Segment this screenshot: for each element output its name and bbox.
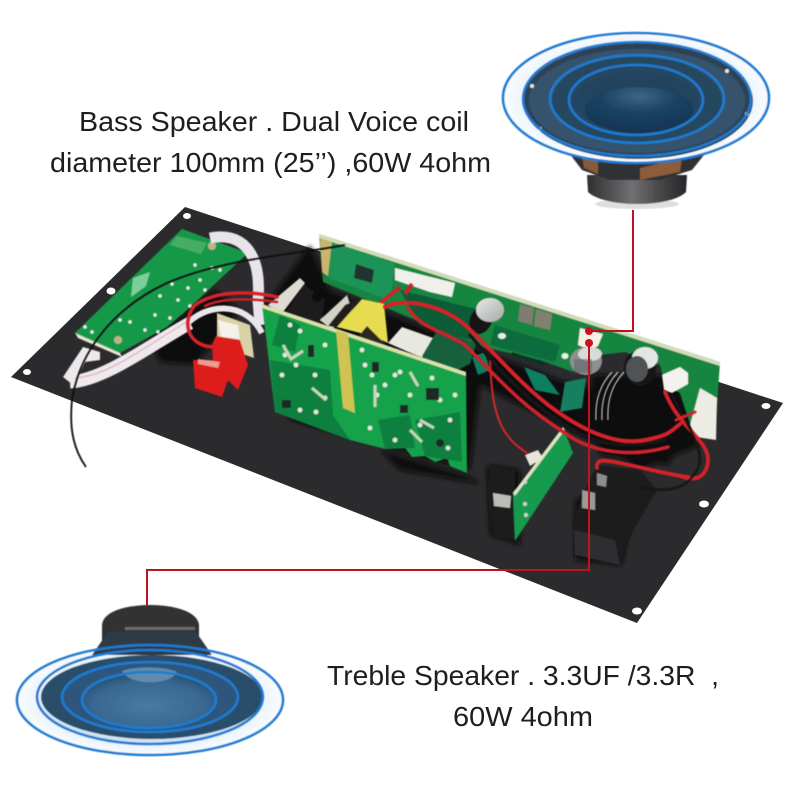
white ribbon cables (63, 237, 262, 385)
heading: bass speaker description: diameter 100mm (25’’) ,60W 4ohm (50, 147, 491, 178)
large green capacitor (422, 329, 476, 376)
dark copper fill patches (270, 315, 462, 462)
panel: left control board (75, 229, 248, 357)
red and black wire loom (188, 293, 708, 490)
bass speaker dust dome (585, 87, 693, 133)
grey inductors (518, 304, 552, 330)
bass speaker mounting screws (530, 69, 749, 131)
black mounting plate (11, 207, 783, 623)
power board components (280, 323, 457, 450)
panel: treble speaker (17, 605, 283, 755)
treble speaker sound rings (17, 645, 283, 755)
silver capacitor right (624, 347, 658, 386)
treble speaker dust dome (122, 667, 177, 682)
panel: bass speaker (503, 33, 769, 209)
black socket (487, 466, 516, 540)
heading: treble speaker description (327, 660, 719, 732)
bass speaker sound rings (503, 33, 769, 163)
treble speaker basket (41, 655, 263, 739)
black rocker switch (573, 465, 657, 565)
bass speaker rear halo (503, 33, 769, 163)
heading: treble speaker description: Treble Speaker . 3.3UF /3.3R , (327, 660, 719, 691)
silver capacitor centre (570, 347, 602, 375)
silver capacitor upper (465, 298, 504, 338)
callout line: treble speaker (147, 339, 593, 606)
board holes (498, 333, 506, 339)
black antenna wire (71, 245, 345, 467)
yellow transformer (337, 299, 388, 343)
bass speaker basket (523, 43, 753, 159)
speaker connectors (662, 367, 688, 393)
red switch with connector (193, 313, 254, 397)
treble speaker magnet (92, 605, 212, 655)
white transformer block (388, 327, 433, 358)
panel: main amplifier board (319, 234, 720, 440)
panel: front power board (262, 304, 467, 473)
heading: bass speaker description (50, 106, 491, 178)
callout line: bass speaker (585, 210, 633, 335)
plate mounting holes (23, 213, 770, 614)
heading: treble speaker description: 60W 4ohm (453, 701, 593, 732)
glass coil arcs (596, 372, 624, 420)
shadows on plate (150, 245, 700, 565)
heading: bass speaker description: Bass Speaker . Dual Voice coil (79, 106, 469, 137)
white connector centre (578, 328, 603, 350)
treble speaker rear halo (17, 645, 283, 755)
bass speaker magnet (563, 145, 712, 209)
small vertical input board with socket (487, 427, 573, 541)
red wires behind transformer (378, 284, 412, 305)
white connector top (395, 268, 455, 297)
control board solder points (83, 263, 222, 334)
board teal heat strips (472, 352, 490, 375)
yellow stripe (336, 330, 355, 413)
heat sinks and transformer (268, 278, 476, 376)
